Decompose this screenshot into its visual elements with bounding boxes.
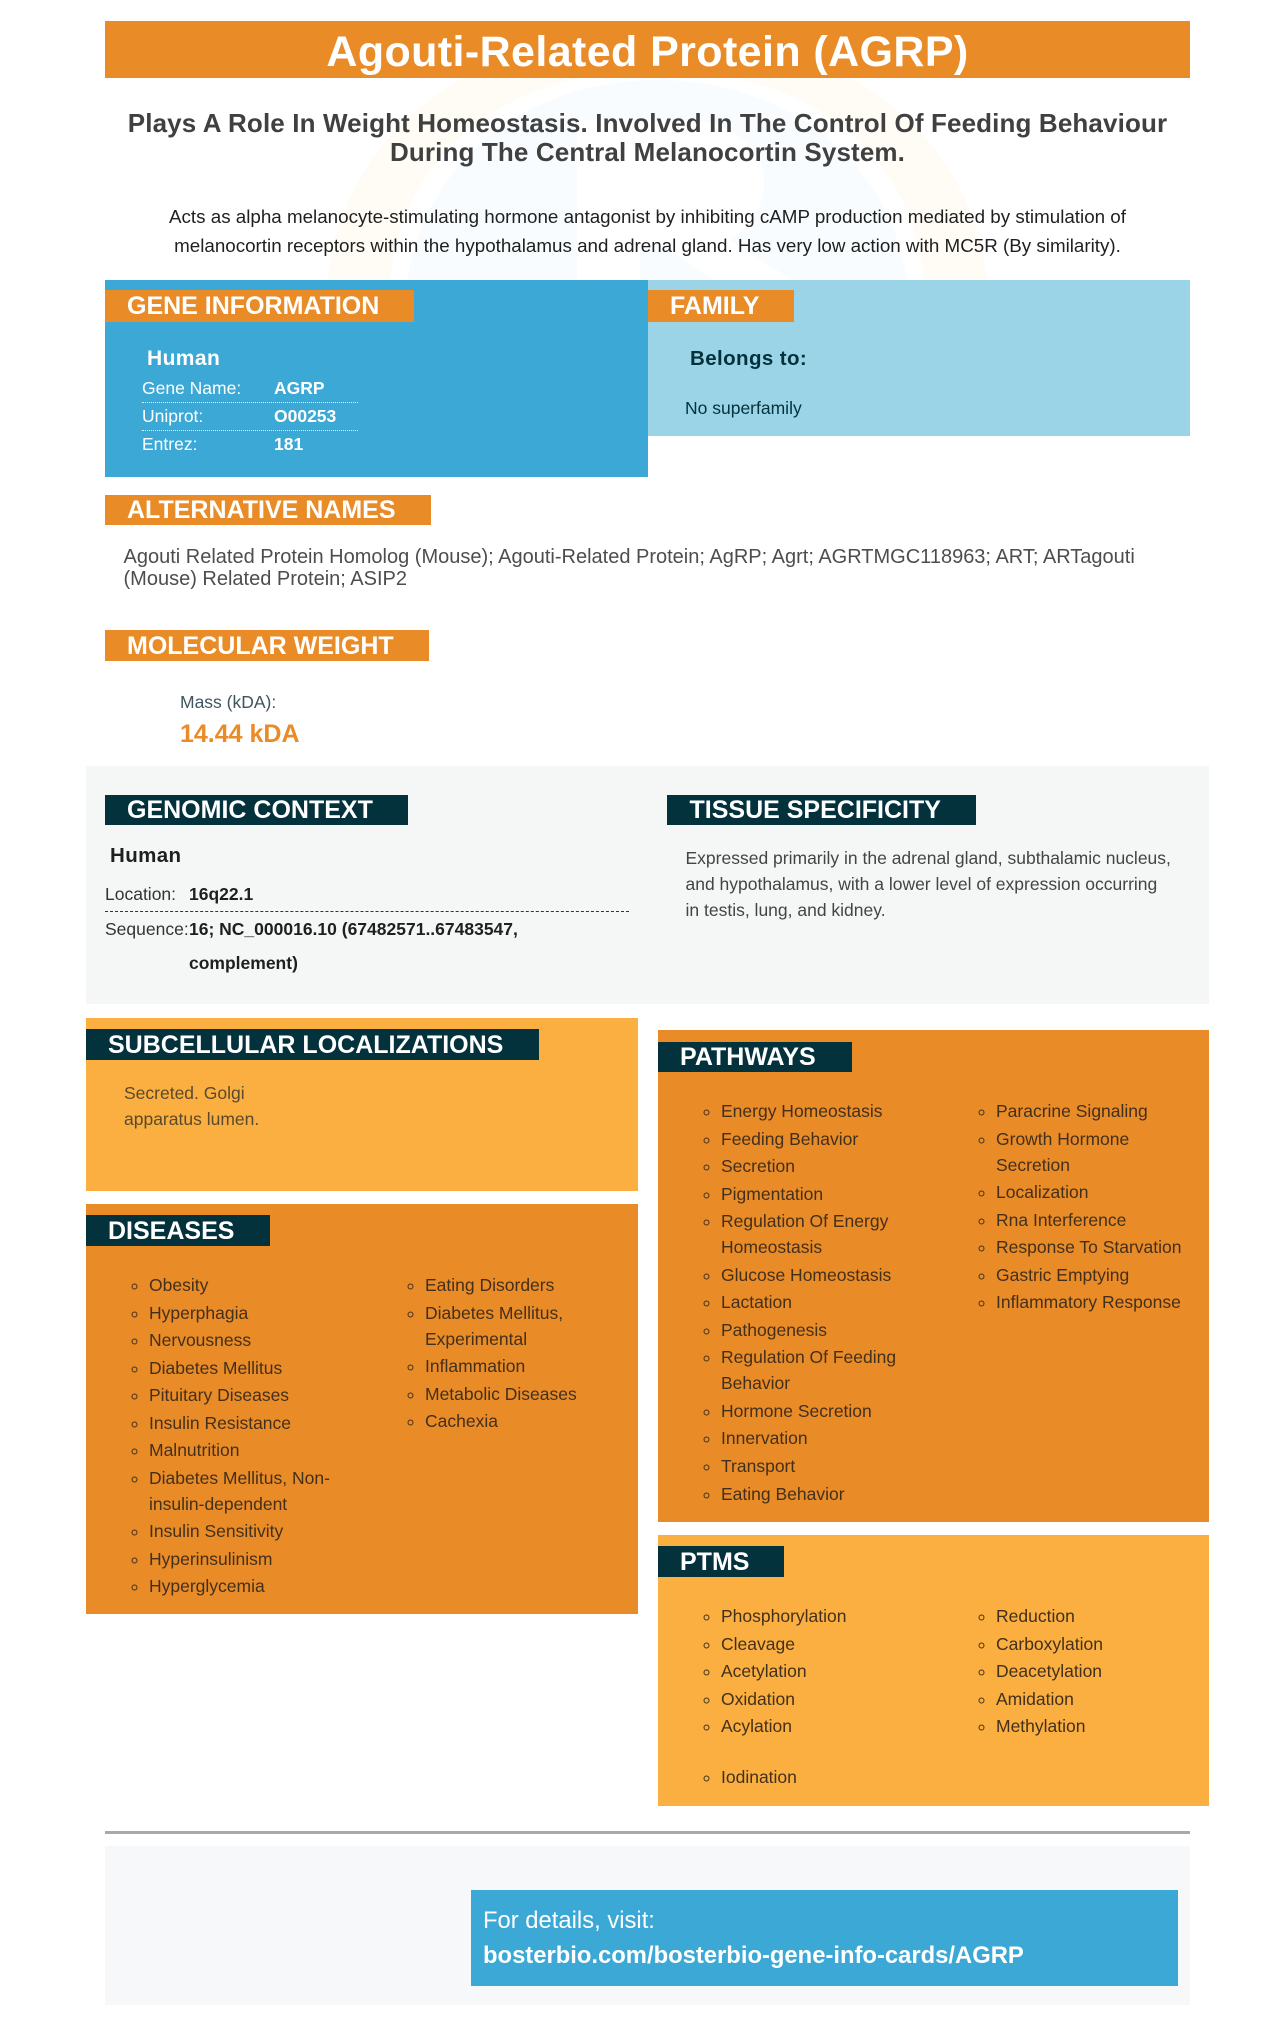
- diseases list column 2: Cachexia: [425, 1411, 498, 1431]
- panel: genomic context and tissue specificity: 16; NC_000016.10 (67482571..67483547,: [189, 919, 518, 939]
- pathways list column 2: Paracrine Signaling: [996, 1101, 1148, 1121]
- uniprot row: O00253: [274, 406, 336, 426]
- diseases list column 1: Insulin Sensitivity: [149, 1521, 283, 1541]
- panel: genomic context and tissue specificity: 16q22.1: [189, 884, 253, 904]
- heading: diseases: [86, 1215, 270, 1246]
- ptms list column 1: Acetylation: [721, 1661, 807, 1681]
- heading: pathways: PATHWAYS: [680, 1043, 816, 1071]
- ptms list column 1: [704, 1606, 846, 1787]
- sequence row: [105, 919, 518, 973]
- pathways list column 1: Behavior: [721, 1373, 790, 1393]
- heading: gene information: GENE INFORMATION: [127, 292, 379, 320]
- alternative names text: Agouti Related Protein Homolog (Mouse); Agouti-Related Protein; AgRP; Agrt; AGRTMGC118963; ART; ARTagouti: [124, 546, 1135, 568]
- pathways list column 2: [978, 1101, 1182, 1312]
- details label: For details, visit:: [483, 1907, 655, 1934]
- gene name row: [142, 377, 358, 403]
- location row: [105, 884, 253, 904]
- panel: family: [648, 280, 1190, 436]
- uniprot row: Uniprot:: [142, 406, 203, 426]
- entrez row: Entrez:: [142, 434, 197, 454]
- pathways list column 2: Growth Hormone: [996, 1129, 1129, 1149]
- pathways list column 1: Regulation Of Energy: [721, 1211, 888, 1231]
- ptms list column 1: Oxidation: [721, 1689, 795, 1709]
- tissue specificity text: and hypothalamus, with a lower level of expression occurring: [686, 874, 1157, 894]
- title: Agouti-Related Protein (AGRP): [326, 28, 969, 76]
- description: Acts as alpha melanocyte-stimulating hormone antagonist by inhibiting cAMP production mediated by stimulation of: [169, 206, 1126, 227]
- mass value: 14.44 kDA: [180, 720, 300, 748]
- pathways list column 1: Secretion: [721, 1156, 795, 1176]
- pathways list column 1: Lactation: [721, 1292, 792, 1312]
- panel: gene information: [105, 280, 648, 477]
- heading: family: FAMILY: [670, 292, 759, 320]
- pathways list column 1: Transport: [721, 1456, 795, 1476]
- localization text: [124, 1083, 259, 1129]
- diseases list column 1: Insulin Resistance: [149, 1413, 291, 1433]
- pathways list column 2: Secretion: [996, 1155, 1070, 1175]
- pathways list column 2: Localization: [996, 1182, 1088, 1202]
- diseases list column 1: Hyperinsulinism: [149, 1549, 273, 1569]
- pathways list column 1: [704, 1101, 896, 1504]
- diseases list column 1: Malnutrition: [149, 1440, 239, 1460]
- alternative names text: (Mouse) Related Protein; ASIP2: [124, 568, 407, 590]
- belongs to label: Belongs to:: [690, 347, 807, 370]
- subtitle: During The Central Melanocortin System.: [390, 137, 905, 167]
- pathways list column 2: Inflammatory Response: [996, 1292, 1181, 1312]
- panel: genomic context and tissue specificity: complement): [189, 953, 298, 973]
- diseases list column 2: Inflammation: [425, 1356, 525, 1376]
- description: [169, 206, 1126, 256]
- dashed divider: [105, 911, 629, 912]
- localization text: apparatus lumen.: [124, 1109, 259, 1129]
- heading: diseases: DISEASES: [108, 1217, 234, 1245]
- diseases list column 1: insulin-dependent: [149, 1494, 287, 1514]
- uniprot row: [142, 405, 358, 431]
- heading: family: [648, 290, 794, 322]
- heading: pathways: [658, 1042, 852, 1072]
- entrez row: 181: [274, 434, 303, 454]
- tissue specificity text: in testis, lung, and kidney.: [686, 900, 886, 920]
- gene name row: Gene Name:: [142, 378, 241, 398]
- entrez row: [142, 434, 303, 454]
- ptms list column 1: Phosphorylation: [721, 1606, 846, 1626]
- species label: Human: [147, 347, 220, 370]
- callout: details link: [471, 1890, 1178, 1986]
- ptms list column 2: [978, 1606, 1103, 1736]
- background watermark: [328, 78, 986, 280]
- description: melanocortin receptors within the hypothalamus and adrenal gland. Has very low action with MC5R (By similarity).: [174, 235, 1121, 256]
- ptms list column 1: Cleavage: [721, 1634, 795, 1654]
- diseases list column 2: Metabolic Diseases: [425, 1384, 577, 1404]
- ptms list column 2: Deacetylation: [996, 1661, 1102, 1681]
- gene name row: AGRP: [274, 378, 325, 398]
- diseases list column 1: Diabetes Mellitus, Non-: [149, 1468, 330, 1488]
- pathways list column 2: Gastric Emptying: [996, 1265, 1129, 1285]
- diseases list column 1: [132, 1275, 330, 1596]
- subtitle: Plays A Role In Weight Homeostasis. Involved In The Control Of Feeding Behaviour: [128, 108, 1167, 138]
- panel: pathways: [658, 1030, 1209, 1522]
- diseases list column 1: Pituitary Diseases: [149, 1385, 289, 1405]
- pathways list column 1: Feeding Behavior: [721, 1129, 858, 1149]
- ptms list column 2: Reduction: [996, 1606, 1075, 1626]
- pathways list column 2: Rna Interference: [996, 1210, 1126, 1230]
- heading: genomic context: GENOMIC CONTEXT: [127, 796, 373, 824]
- panel: footer: [105, 1846, 1190, 2005]
- pathways list column 1: Hormone Secretion: [721, 1401, 872, 1421]
- tissue specificity text: [686, 848, 1171, 920]
- diseases list column 2: Experimental: [425, 1329, 527, 1349]
- diseases list column 2: [408, 1275, 577, 1431]
- details url: bosterbio.com/bosterbio-gene-info-cards/AGRP: [483, 1942, 1024, 1969]
- pathways list column 1: Pigmentation: [721, 1184, 823, 1204]
- ptms list column 1: Iodination: [721, 1767, 797, 1787]
- family value: No superfamily: [685, 398, 802, 418]
- diseases list column 1: Hyperphagia: [149, 1303, 248, 1323]
- pathways list column 1: Regulation Of Feeding: [721, 1347, 896, 1367]
- mass label: Mass (kDA):: [180, 692, 276, 712]
- pathways list column 1: Glucose Homeostasis: [721, 1265, 891, 1285]
- pathways list column 1: Homeostasis: [721, 1237, 822, 1257]
- panel: subcellular localizations: [86, 1018, 638, 1191]
- diseases list column 1: Nervousness: [149, 1330, 251, 1350]
- title: [105, 21, 1190, 78]
- heading: tissue specificity: TISSUE SPECIFICITY: [690, 796, 941, 824]
- species label: Human: [110, 844, 181, 867]
- diseases list column 2: Diabetes Mellitus,: [425, 1303, 563, 1323]
- sequence row: Sequence:: [105, 919, 189, 939]
- heading: alternative names: ALTERNATIVE NAMES: [127, 496, 396, 524]
- subtitle: [128, 108, 1167, 167]
- pathways list column 1: Pathogenesis: [721, 1320, 827, 1340]
- heading: ptms: [658, 1546, 784, 1577]
- diseases list column 2: Eating Disorders: [425, 1275, 554, 1295]
- heading: ptms: PTMS: [680, 1548, 749, 1576]
- heading: subcellular localizations: SUBCELLULAR LOCALIZATIONS: [108, 1031, 503, 1059]
- pathways list column 1: Innervation: [721, 1428, 808, 1448]
- ptms list column 1: Acylation: [721, 1716, 792, 1736]
- heading: molecular weight: MOLECULAR WEIGHT: [127, 632, 394, 660]
- localization text: Secreted. Golgi: [124, 1083, 245, 1103]
- ptms list column 2: Methylation: [996, 1716, 1086, 1736]
- alternative names text: [124, 546, 1135, 590]
- pathways list column 1: Eating Behavior: [721, 1484, 845, 1504]
- diseases list column 1: Hyperglycemia: [149, 1576, 265, 1596]
- panel: diseases: [86, 1204, 638, 1614]
- ptms list column 2: Carboxylation: [996, 1634, 1103, 1654]
- diseases list column 1: Diabetes Mellitus: [149, 1358, 282, 1378]
- panel: ptms: [658, 1535, 1209, 1806]
- tissue specificity text: Expressed primarily in the adrenal gland, subthalamic nucleus,: [686, 848, 1171, 868]
- pathways list column 2: Response To Starvation: [996, 1237, 1182, 1257]
- ptms list column 2: Amidation: [996, 1689, 1074, 1709]
- pathways list column 1: Energy Homeostasis: [721, 1101, 882, 1121]
- location row: Location:: [105, 884, 176, 904]
- diseases list column 1: Obesity: [149, 1275, 208, 1295]
- panel: genomic context and tissue specificity: [86, 766, 1209, 1004]
